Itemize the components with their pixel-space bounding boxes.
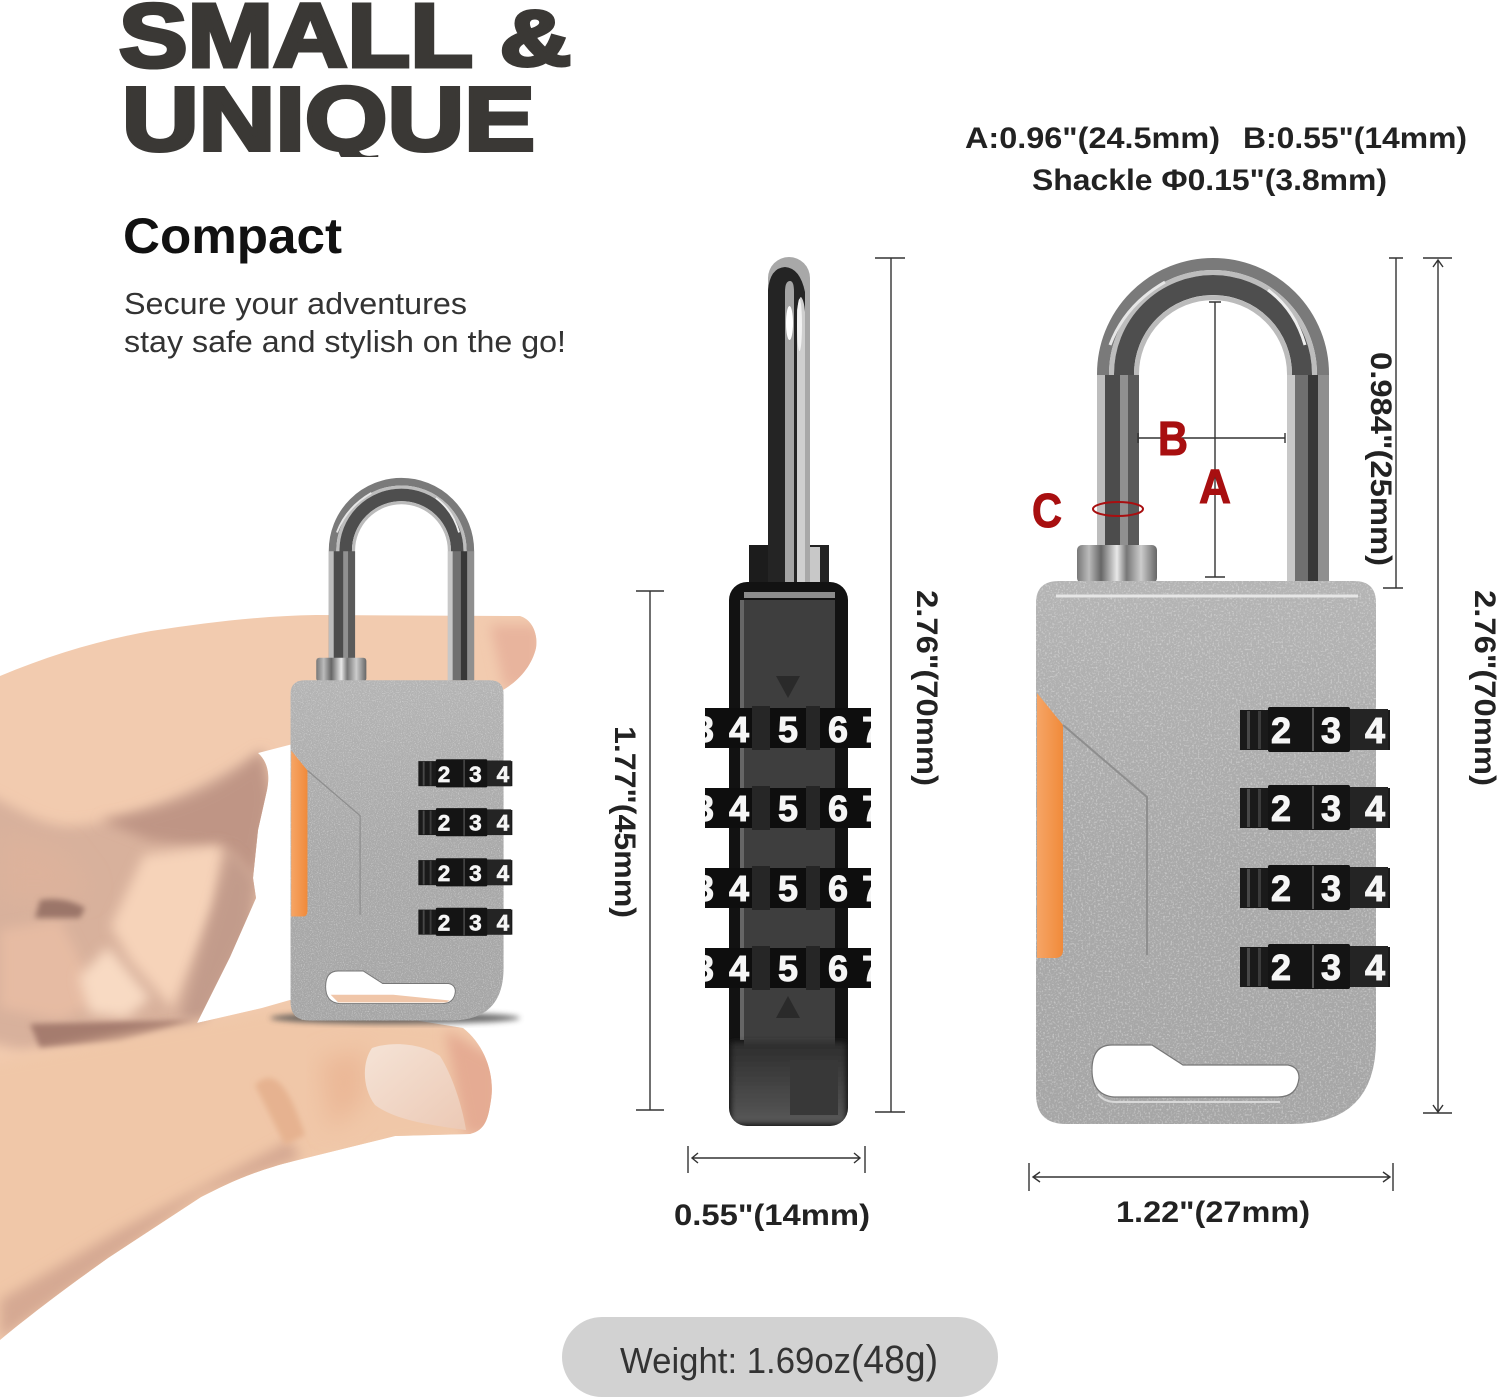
small lock dials: 4 [497,811,510,836]
curled fingers base [0,750,275,1050]
dimension: side width: 0.55"(14mm) [674,1199,870,1232]
front orange bar [1037,693,1063,958]
side dials: 4 [729,709,749,750]
front dials: 3 [1321,710,1341,751]
small lock shackle [331,482,471,680]
front dials [1240,707,1390,989]
front dials: 3 [1321,947,1341,988]
side dials: 6 [828,868,848,909]
tagline text [124,286,566,359]
front hole [1092,1045,1299,1097]
side dials: 6 [828,709,848,750]
weight pill: (48g) [851,1338,938,1382]
front collar [1077,545,1157,583]
side dials: 3 [694,788,714,829]
side dials: 7 [862,788,882,829]
title: UNIQUE [122,70,535,170]
shackle specification text [965,122,1467,197]
side dials: 4 [729,868,749,909]
dimension: side dial height [608,591,664,1110]
dimension: shackle clearance: 0.984"(25mm) [1364,352,1397,566]
small lock dials: 4 [497,762,510,787]
side dials: 3 [694,868,714,909]
dimension: front width: 1.22"(27mm) [1116,1196,1310,1229]
side dials: 7 [862,948,882,989]
dimension: side dial height: 1.77"(45mm) [608,726,641,918]
small lock orange bar [291,750,307,916]
front dials: 2 [1271,710,1291,751]
lock shadow on thumb [270,1012,520,1024]
inner measure lines with A B C labels: A [1199,461,1231,514]
thumbnail [365,1044,466,1130]
small lock dials: 3 [469,861,482,886]
weight pill [562,1317,998,1397]
small lock dials: 4 [497,910,510,935]
small lock dials: 3 [469,811,482,836]
small lock crease [307,771,360,915]
small lock hole [326,971,455,1004]
front dials: 4 [1365,947,1385,988]
side dials: 5 [778,788,798,829]
small lock dials: 3 [469,762,482,787]
title [119,0,571,170]
side body [729,582,848,1126]
front dials: 4 [1365,710,1385,751]
small lock skin through hole [331,995,450,1002]
front body speckle [1036,581,1376,1124]
side dials: 3 [694,709,714,750]
small lock dials: 3 [469,910,482,935]
front shackle [1101,264,1324,581]
side dials: 5 [778,709,798,750]
small lock dials: 2 [438,762,450,787]
small lock body [291,680,504,1020]
small lock in hand [291,482,512,1020]
dimension: side total height [875,258,943,1112]
side dials: 6 [828,788,848,829]
front dials: 4 [1365,868,1385,909]
side dials: 4 [729,788,749,829]
front dials: 2 [1271,788,1291,829]
inner measure lines with A B C labels: C [1032,485,1062,538]
weight pill: Weight: 1.69oz [620,1340,851,1381]
dimension: side width [674,1146,870,1232]
side dials: 4 [729,948,749,989]
dimension: side total height: 2.76"(70mm) [910,590,943,786]
front crease [1063,725,1147,955]
side triangle marks [776,676,800,1018]
heading: compact: Compact [123,208,342,264]
side view lock [705,257,871,1126]
side dials: 6 [828,948,848,989]
shackle specification text: A:0.96"(24.5mm) [965,122,1220,155]
front body highlight [1056,594,1358,598]
front dials: 3 [1321,788,1341,829]
front view lock [1036,264,1390,1124]
front dials: 4 [1365,788,1385,829]
small lock dials: 2 [438,910,450,935]
front hole rim [1098,1094,1280,1102]
tagline text: Secure your adventures [124,286,467,321]
side dials [705,706,871,990]
shackle specification text: Shackle Φ0.15"(3.8mm) [1032,164,1387,197]
small lock dials: 2 [438,811,450,836]
side dials: 5 [778,948,798,989]
front dials: 2 [1271,868,1291,909]
small lock dials: 4 [497,861,510,886]
dimension: front total height [1423,258,1500,1113]
small lock dials [418,759,512,936]
front body [1036,581,1376,1124]
small lock speckle [291,680,504,1020]
side collar [749,545,829,583]
side dials: 7 [862,868,882,909]
side dials: 7 [862,709,882,750]
shackle specification text: B:0.55"(14mm) [1243,122,1467,155]
small lock collar [316,658,366,682]
small lock dials: 2 [438,861,450,886]
inner measure lines with A B C labels [1032,302,1285,577]
tagline text: stay safe and stylish on the go! [124,324,566,359]
inner measure lines with A B C labels: B [1158,413,1188,466]
side dials: 5 [778,868,798,909]
hand holding lock [0,615,540,1340]
side dials: 3 [694,948,714,989]
front dials: 2 [1271,947,1291,988]
dimension: shackle clearance [1364,258,1403,588]
front dials: 3 [1321,868,1341,909]
side shackle [768,255,810,585]
dimension: front width [1029,1163,1393,1229]
